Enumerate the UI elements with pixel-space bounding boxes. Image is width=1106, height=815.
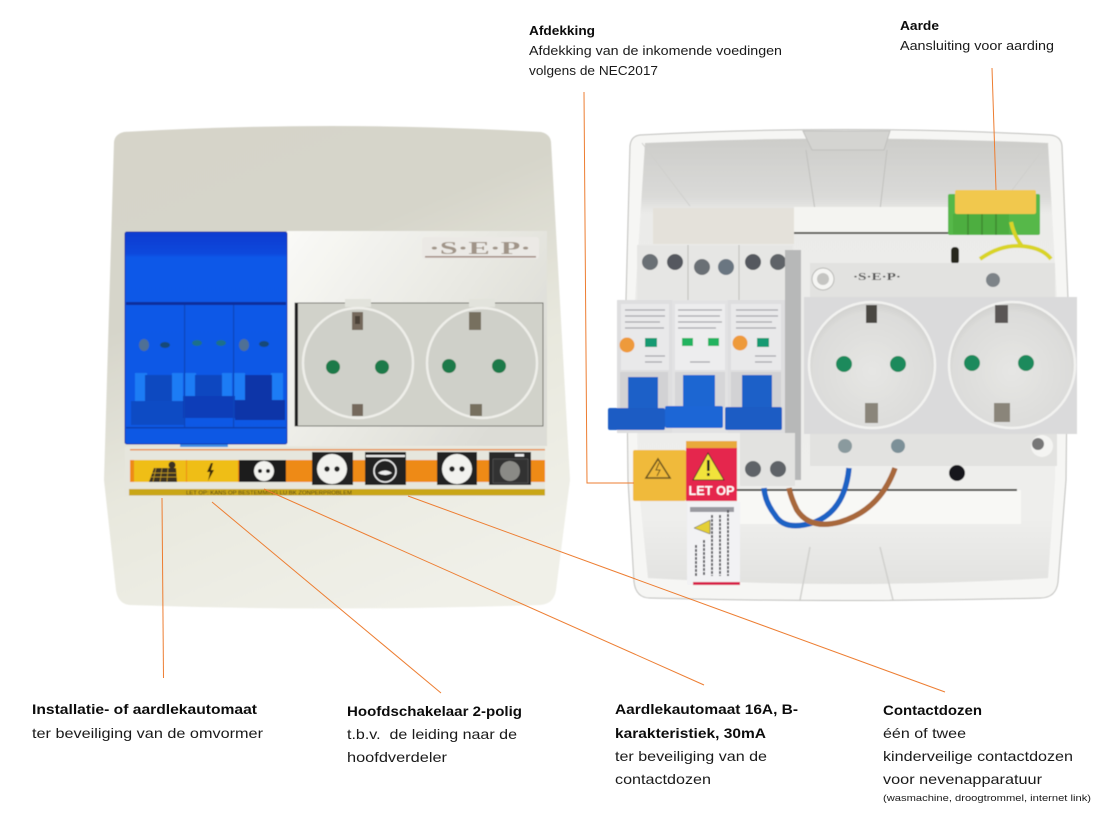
wires xyxy=(764,468,895,526)
blue transparent breaker cover xyxy=(125,232,287,451)
text: Contactdozen: Contactdozen xyxy=(883,702,982,718)
cover strip xyxy=(653,208,794,244)
SEP logo: ·S·E·P· xyxy=(429,238,531,258)
icon: socket xyxy=(317,454,347,484)
text: Aarde: Aansluiting voor aarding xyxy=(900,38,1054,53)
text: Afdekking: Afdekking xyxy=(529,23,595,38)
bottom rail xyxy=(737,489,1021,524)
text: Contactdozen: voor nevenapparatuur xyxy=(883,771,1042,787)
icon: socket xyxy=(442,454,472,484)
peg xyxy=(951,247,959,264)
socket plate xyxy=(295,299,543,426)
earth wire xyxy=(980,222,1051,259)
text: Afdekking xyxy=(529,23,782,78)
socket 1 xyxy=(809,302,935,428)
line: aardlekautomaat xyxy=(264,489,704,685)
text: Contactdozen xyxy=(883,702,1091,804)
icon: washing machine xyxy=(366,455,405,482)
warning bar: LET OP: KANS OP BESTEMMING LU BK ZONPERPROBLEM xyxy=(186,490,352,496)
text: Aardlekautomaat 16A: contactdozen xyxy=(615,771,711,787)
callout lines xyxy=(162,68,996,693)
breaker 2 xyxy=(665,300,728,433)
line: afdekking xyxy=(584,92,634,483)
earth terminal xyxy=(948,190,1051,264)
text: Hoofdschakelaar 2-polig: Hoofdschakelaar 2-polig xyxy=(347,703,522,719)
side body xyxy=(785,250,801,480)
enclosure shell xyxy=(626,130,1068,600)
text: Contactdozen: (wasmachine, droogtrommel, internet link) xyxy=(883,793,1091,804)
text: Hoofdschakelaar 2-polig xyxy=(347,703,522,765)
breaker 3 xyxy=(725,300,785,433)
warning bar xyxy=(129,489,545,496)
icon: dryer xyxy=(493,454,528,483)
icon: socket small xyxy=(254,461,274,481)
line: aarde xyxy=(992,68,996,190)
top rail xyxy=(794,207,949,234)
socket 2 xyxy=(427,299,537,418)
line: contactdozen xyxy=(408,496,945,692)
panel: open enclosure interior xyxy=(608,130,1077,600)
warning tag xyxy=(687,502,740,585)
icon: lightning xyxy=(207,463,214,481)
yellow shield xyxy=(633,450,686,501)
text: Aardlekautomaat 16A xyxy=(615,701,798,787)
text: Hoofdschakelaar 2-polig: t.b.v. de leiding naar de xyxy=(347,726,517,742)
text: Installatie- of aardlekautomaat: ter beveiliging van de omvormer xyxy=(32,725,263,741)
text: Aardlekautomaat 16A: ter beveiliging van de xyxy=(615,748,767,764)
warning label xyxy=(686,441,737,501)
text: Aardlekautomaat 16A: Aardlekautomaat 16A, B- xyxy=(615,701,798,717)
socket 1 xyxy=(303,299,413,418)
socket unit xyxy=(804,263,1077,481)
breaker 1 xyxy=(608,300,672,433)
text: Afdekking: volgens de NEC2017 xyxy=(529,63,658,78)
logo: ·S·E·P· xyxy=(853,272,901,283)
terminal blocks top xyxy=(637,245,793,303)
line: installatie automaat xyxy=(162,498,164,678)
label strip with symbols xyxy=(125,447,545,496)
hinge tab top xyxy=(803,131,890,210)
text: Aarde xyxy=(900,18,1054,53)
text: Installatie- of aardlekautomaat: Installatie- of aardlekautomaat xyxy=(32,701,257,717)
text: Contactdozen: kinderveilige contactdozen xyxy=(883,748,1073,764)
text: Afdekking: Afdekking van de inkomende voedingen xyxy=(529,43,782,58)
text: Aarde: Aarde xyxy=(900,18,939,33)
right cover panel xyxy=(287,231,547,446)
icon: solar panel xyxy=(149,462,177,482)
socket 2 xyxy=(949,302,1075,428)
text: Contactdozen: één of twee xyxy=(883,725,966,741)
panel: closed enclosure with cover xyxy=(104,126,570,608)
text: Hoofdschakelaar 2-polig: hoofdverdeler xyxy=(347,749,447,765)
line: hoofdschakelaar xyxy=(212,502,441,693)
lower breaker terminal xyxy=(740,433,795,486)
enclosure body xyxy=(104,126,570,608)
breakers xyxy=(608,300,785,433)
SEP logo xyxy=(422,237,539,259)
warning label: LET OP xyxy=(688,483,735,498)
bottom ribs xyxy=(800,547,893,600)
text: Installatie- of aardlekautomaat xyxy=(32,701,263,741)
text: Aardlekautomaat 16A: karakteristiek, 30mA xyxy=(615,725,766,741)
